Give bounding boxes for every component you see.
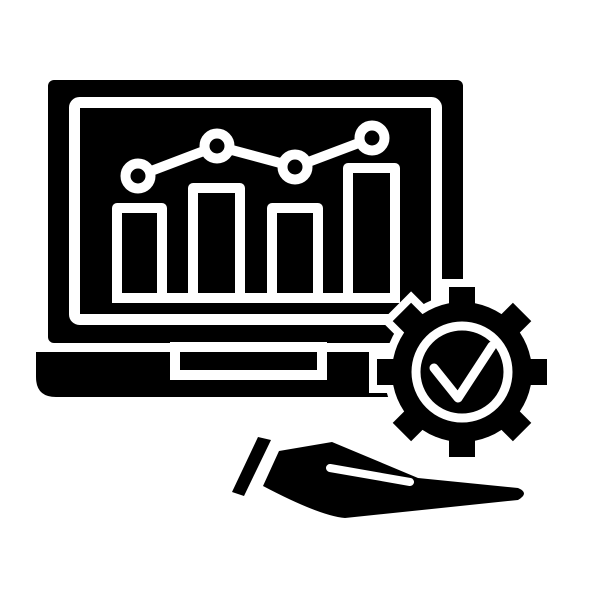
bar chart [112, 168, 400, 298]
icon: hand [232, 437, 524, 518]
icon: gear with checkmark [377, 287, 547, 457]
laptop base [36, 347, 400, 397]
line chart with markers [126, 126, 384, 188]
laptop screen [48, 80, 463, 343]
